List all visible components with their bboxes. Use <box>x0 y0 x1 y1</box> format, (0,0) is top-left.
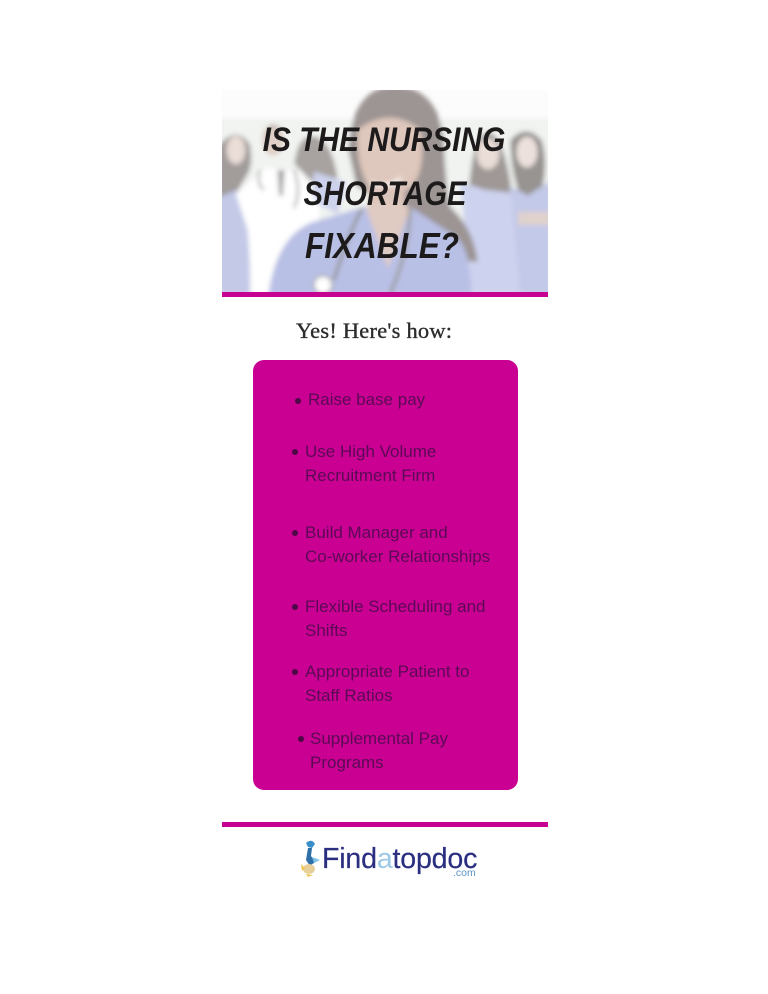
item: supplemental pay: Supplemental Pay <box>310 729 448 748</box>
bottom magenta divider <box>222 822 548 827</box>
item: relationships: Build Manager and <box>305 523 448 542</box>
item: flexible scheduling <box>292 597 486 640</box>
item: supplemental pay <box>298 729 448 772</box>
subheading: Yes! Here's how: <box>296 318 452 343</box>
central nurse scrubs <box>268 206 472 296</box>
item: recruitment firm: Recruitment Firm <box>305 466 435 484</box>
item: staff ratios: Appropriate Patient to <box>305 662 469 681</box>
item: raise base pay: Raise base pay <box>308 390 425 409</box>
top magenta divider <box>222 292 548 297</box>
second nurse behind <box>294 136 338 182</box>
item: supplemental pay: Programs <box>310 752 384 772</box>
logo .com: .com <box>453 867 476 879</box>
item: staff ratios <box>292 662 469 704</box>
item: flexible scheduling: Flexible Scheduling and <box>305 597 486 616</box>
logo: Findatopdoc.com <box>301 840 477 879</box>
header image title: IS THE NURSING <box>263 121 505 159</box>
central nurse face <box>358 118 422 196</box>
far left nurse <box>218 134 252 202</box>
logo wordmark: Findatopdoc <box>322 843 477 875</box>
header image title: FIXABLE? <box>305 225 459 266</box>
central nurse hair <box>348 86 478 262</box>
item: relationships: Co-worker Relationships <box>305 546 490 566</box>
icon: doctor duck mascot <box>301 840 320 877</box>
right nurses <box>467 130 514 196</box>
item: relationships <box>292 523 490 566</box>
header image title <box>263 121 505 266</box>
item: recruitment firm <box>292 442 436 484</box>
item: flexible scheduling: Shifts <box>305 620 348 640</box>
panel: solutions list <box>253 360 518 790</box>
doctor in white coat <box>236 168 320 296</box>
item: staff ratios: Staff Ratios <box>305 686 393 704</box>
header photo: blurred group of nurses <box>222 90 548 292</box>
item: recruitment firm: Use High Volume <box>305 442 436 461</box>
header image title: SHORTAGE <box>303 175 466 213</box>
